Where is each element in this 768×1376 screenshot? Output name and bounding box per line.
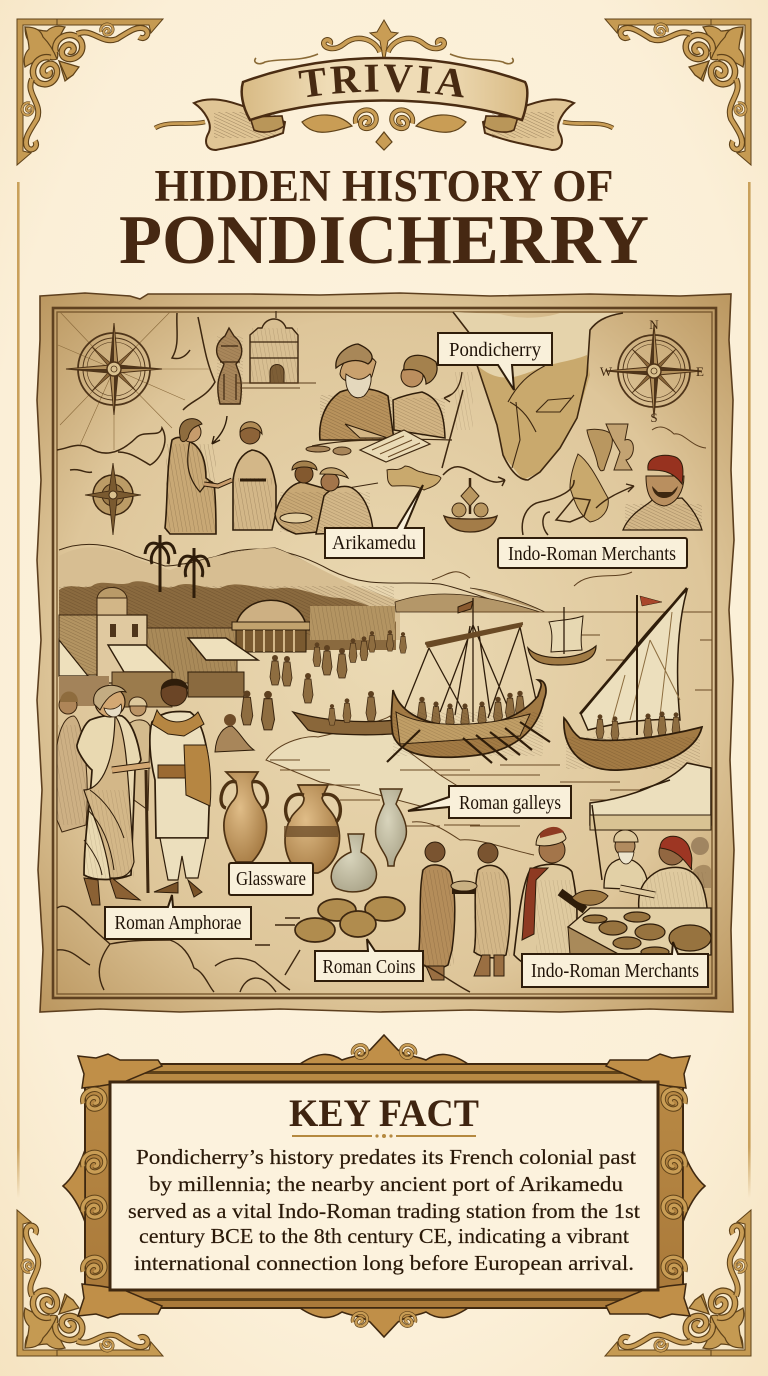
compass letters — [600, 317, 704, 425]
seated man — [215, 714, 254, 752]
bottom land sketches — [57, 906, 470, 992]
Roman galley ship — [387, 598, 550, 763]
sea ripples — [270, 635, 712, 826]
compass rose: small — [85, 463, 141, 535]
scholar elder — [320, 344, 394, 440]
arrow: handshake — [212, 416, 227, 444]
exchange trader left — [418, 842, 455, 980]
seated workers — [275, 461, 373, 534]
label: Roman Amphorae — [105, 895, 251, 939]
key fact heading: KEY FACT — [289, 1092, 479, 1135]
label: Pondicherry: Pondicherry — [449, 339, 541, 361]
corner ornament: bottom right — [605, 1210, 751, 1356]
amphora right — [284, 785, 340, 873]
background woman — [57, 692, 87, 832]
land sketch top left — [57, 313, 215, 472]
clouds — [432, 427, 706, 586]
market figure: Roman elder — [77, 685, 150, 905]
key fact body text: century BCE to the 8th century CE, indicating a vibrant — [139, 1224, 629, 1248]
harbour town — [59, 588, 395, 707]
label: Indo-Roman Merchants bottom: Indo-Roman Merchants — [531, 961, 699, 982]
Roman merchant portrait — [623, 455, 702, 530]
label: Roman galleys: Roman galleys — [459, 793, 561, 814]
beach crowd — [215, 630, 406, 752]
text panel — [110, 1082, 658, 1290]
label: Roman Coins: Roman Coins — [322, 957, 416, 978]
handshake man — [204, 422, 276, 530]
background turbaned man — [128, 697, 150, 810]
title: PONDICHERRY — [119, 202, 649, 279]
corner ornament: bottom left — [17, 1210, 163, 1356]
compass letters: N — [649, 317, 659, 332]
hills and palms — [59, 535, 545, 650]
statue — [217, 328, 243, 404]
shore boat — [293, 691, 395, 735]
trivia heading: TRIVIA — [298, 64, 464, 98]
corner ornament: top left — [17, 19, 163, 165]
market elder and back figure — [604, 830, 711, 890]
label: Arikamedu: Arikamedu — [332, 533, 416, 554]
compass letters: E — [696, 364, 704, 379]
market table with bowls — [568, 908, 711, 957]
India coast map — [453, 312, 623, 480]
title — [119, 161, 649, 279]
side rules — [17, 182, 751, 1198]
route lines and islands — [348, 372, 505, 490]
ornate ship emblem — [444, 478, 497, 532]
market figure: Indian trader — [150, 679, 211, 897]
glass vases — [331, 789, 406, 892]
key fact body text: international connection long before European arrival. — [134, 1251, 634, 1275]
label: Arikamedu — [325, 485, 424, 558]
beach and shore — [266, 716, 480, 806]
label: Glassware: Glassware — [236, 869, 306, 890]
compass rose: top right — [606, 325, 702, 417]
label: Indo-Roman Merchants top: Indo-Roman Merchants — [508, 544, 676, 565]
corner ornament: top right — [605, 19, 751, 165]
compass letters: W — [600, 364, 613, 379]
key fact body text — [128, 1145, 640, 1275]
inner map border — [53, 308, 716, 998]
trivia banner — [154, 19, 614, 151]
large sailing ship — [564, 588, 702, 770]
ornate frame — [63, 1035, 705, 1337]
compass rose: top left — [66, 323, 162, 415]
label: Roman Coins — [315, 939, 423, 981]
label: Indo-Roman Merchants top — [498, 538, 687, 568]
market merchant right — [620, 836, 707, 925]
roman coins — [295, 897, 405, 942]
label: Roman Amphorae: Roman Amphorae — [114, 913, 242, 934]
label: Roman galleys — [408, 786, 571, 818]
compass letters: S — [650, 410, 658, 425]
label: Indo-Roman Merchants bottom — [522, 942, 708, 987]
compass rays — [58, 312, 210, 450]
exchange trader right — [451, 843, 510, 976]
merchant with bowl — [514, 827, 608, 970]
Sri Lanka and relics — [522, 424, 634, 535]
handshake woman — [165, 419, 216, 534]
key fact body text: Pondicherry’s history predates its French colonial past — [136, 1145, 636, 1169]
distant ship — [528, 607, 596, 665]
title: HIDDEN HISTORY OF — [154, 161, 614, 211]
domed building — [236, 311, 316, 388]
label: Pondicherry — [438, 333, 552, 390]
amphora left — [221, 772, 267, 862]
heading divider — [292, 1134, 476, 1138]
key fact body text: by millennia; the nearby ancient port of Arikamedu — [149, 1172, 623, 1196]
panel: illustrated map — [37, 293, 734, 1012]
key fact body text: served as a vital Indo-Roman trading station from the 1st — [128, 1199, 640, 1223]
panel: key fact — [63, 1035, 705, 1337]
scholars table and paper — [306, 430, 452, 462]
market stall awning — [590, 763, 711, 880]
label: Glassware — [229, 863, 313, 895]
scholar young — [393, 355, 445, 438]
